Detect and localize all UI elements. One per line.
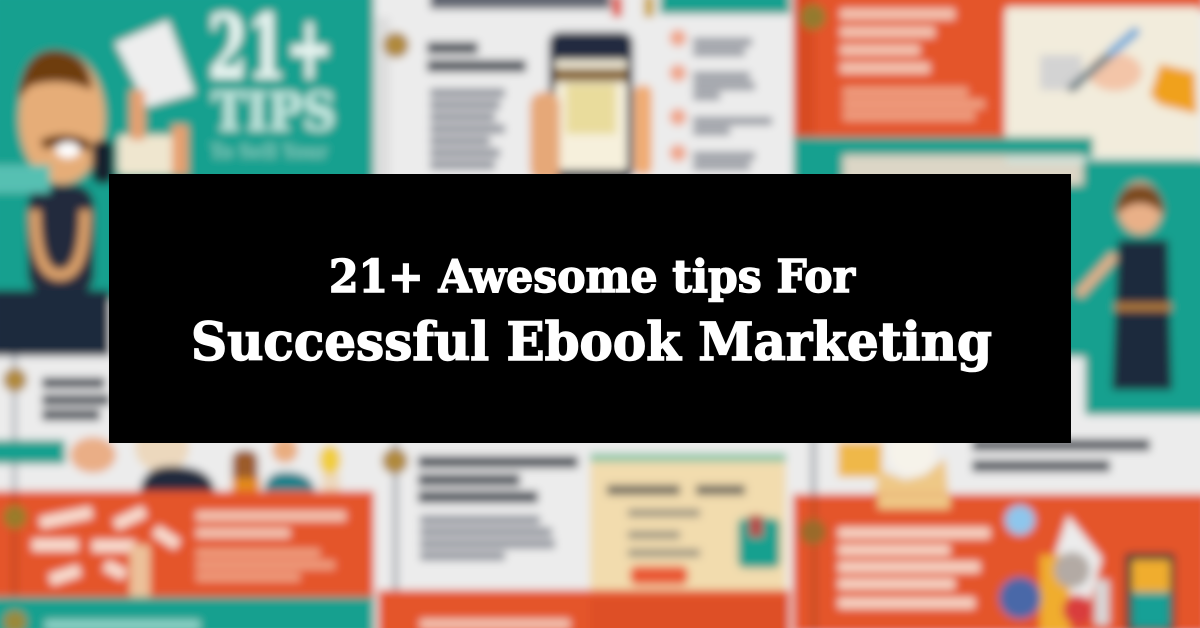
people row: [135, 424, 341, 495]
panel: orange writing section: [793, 0, 1005, 137]
panel: teal strip at bottom left: [0, 597, 374, 628]
phone illustration: [530, 32, 652, 182]
panel: orange bottom middle: [378, 590, 790, 628]
social icons: [999, 505, 1175, 628]
sticky note: [1150, 64, 1197, 114]
panel: orange keywords: [0, 491, 374, 598]
checklist: [678, 38, 772, 166]
icon: pen: [1072, 32, 1135, 88]
headline: [191, 250, 992, 373]
cover title: To Sell Your: [210, 139, 328, 163]
cover title: [208, 0, 336, 163]
icon: envelope: [838, 428, 950, 508]
panel: teal strip and lady section: [793, 137, 1200, 420]
panel: teal cover: [0, 0, 374, 300]
panel: lower right title: [790, 415, 1200, 508]
character: man with phone: [0, 50, 188, 295]
panel: left lower section: [0, 356, 374, 496]
panel: landing page form card: [590, 453, 786, 598]
headline: 21+ Awesome tips For: [329, 250, 856, 303]
panel: orange social section: [793, 494, 1200, 628]
headline: Successful Ebook Marketing: [191, 312, 992, 373]
panel: phone section: [376, 0, 790, 347]
panel: cream writing illustration: [1005, 0, 1200, 157]
panel: navy footer of cover: [0, 290, 110, 356]
panel: landing page text: [376, 347, 796, 595]
cover title: TIPS: [212, 82, 336, 143]
top header strip: [430, 0, 790, 17]
title banner: [109, 174, 1071, 443]
character: woman: [1078, 182, 1172, 390]
cover paper: [115, 20, 195, 107]
